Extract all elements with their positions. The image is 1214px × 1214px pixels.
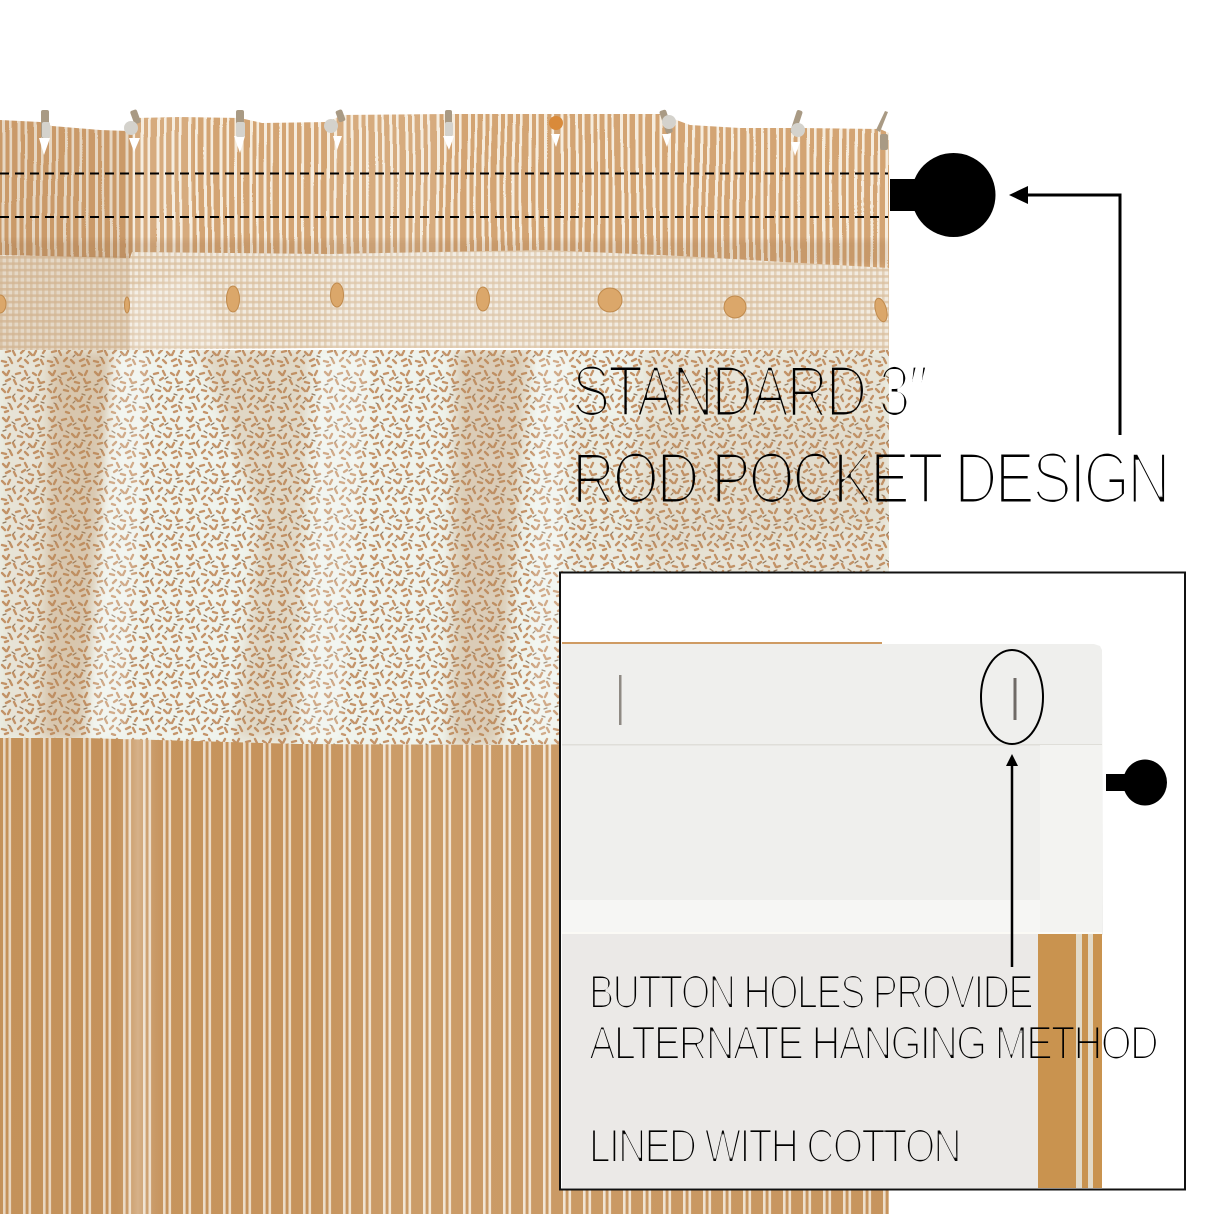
- callout ring: [981, 650, 1043, 744]
- heading: rod pocket design: [572, 352, 1168, 519]
- icon: button hole left: [619, 675, 622, 725]
- arrow: points to rod: [1009, 186, 1120, 435]
- lower striped panel: [0, 735, 889, 1214]
- rod pocket dashed stitch lines: [0, 174, 888, 217]
- lower lining: [562, 934, 1038, 1188]
- text: lined with cotton: LINED WITH COTTON: [589, 1119, 960, 1172]
- text: button holes: BUTTON HOLES PROVIDE: [589, 965, 1033, 1018]
- gingham button band: [0, 250, 889, 352]
- fold shading: [0, 350, 890, 745]
- icon: button hole right: [1014, 678, 1016, 720]
- text: button holes: [589, 965, 1157, 1069]
- rod pocket striped band: [0, 114, 889, 268]
- icon: curtain clips: [39, 109, 888, 156]
- icon: wooden buttons: [0, 283, 889, 323]
- heading: rod pocket design: STANDARD 3″: [572, 352, 928, 432]
- curtain panel: [0, 100, 900, 1214]
- icon: small rod end: [1106, 760, 1167, 806]
- hem lining: [562, 644, 1103, 935]
- striped side edge: [1038, 934, 1102, 1188]
- curtain back top edge: [562, 642, 882, 645]
- panel: lining inset: [560, 572, 1185, 1190]
- arrow: points to button hole: [1006, 754, 1018, 967]
- icon: curtain rod end: [890, 153, 996, 237]
- floral ruffle: [0, 345, 890, 745]
